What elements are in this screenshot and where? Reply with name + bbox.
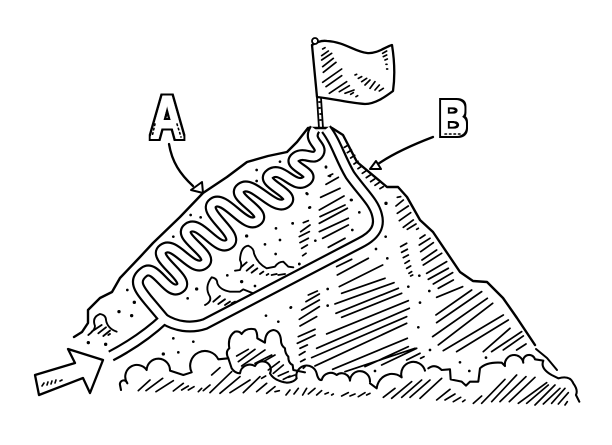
arrow to path A bbox=[169, 144, 203, 193]
foreground bushes, left part bbox=[120, 329, 370, 397]
flag on the summit bbox=[312, 38, 394, 128]
bush hatching bbox=[138, 349, 370, 397]
bush: lower left bbox=[88, 314, 117, 336]
entry arrow bbox=[35, 349, 103, 395]
bush outline bbox=[120, 351, 370, 390]
flag pole bbox=[317, 98, 323, 128]
mountain face hatching bbox=[297, 145, 526, 372]
mountain outline bbox=[74, 128, 557, 370]
flag cloth bbox=[312, 41, 394, 104]
bush: upper centre bbox=[235, 246, 293, 275]
flag hatching bbox=[322, 48, 388, 97]
flag pole knob bbox=[312, 38, 318, 44]
foreground bushes, right part bbox=[370, 355, 579, 405]
bush outline bbox=[370, 355, 579, 402]
label B: B bbox=[439, 92, 467, 146]
label B shading ticks bbox=[445, 133, 462, 135]
bush hatching bbox=[383, 375, 568, 405]
road network bbox=[109, 129, 378, 357]
label A shading ticks bbox=[152, 124, 181, 137]
label A: A bbox=[150, 85, 184, 151]
road outlines bbox=[111, 129, 378, 356]
arrow to path B bbox=[370, 137, 433, 169]
small bushes on the slope bbox=[88, 246, 293, 336]
tall bush outline bbox=[227, 329, 305, 372]
mountain speckle dots bbox=[87, 160, 487, 372]
road surface bbox=[109, 129, 378, 357]
bush: centre bbox=[205, 277, 253, 305]
